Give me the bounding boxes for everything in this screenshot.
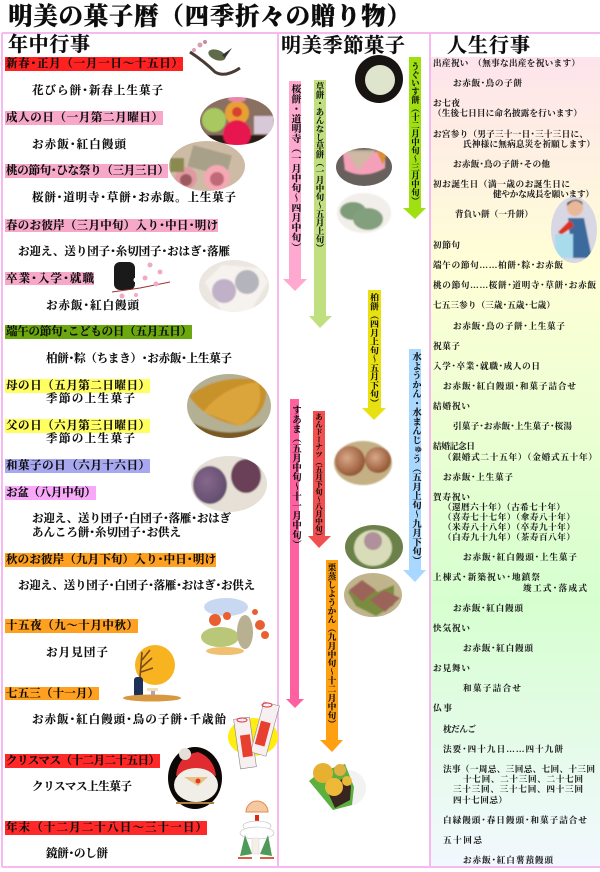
event: christmas bbox=[5, 753, 160, 793]
event: year end bbox=[5, 820, 207, 860]
list: birth celebrations: お七夜 bbox=[433, 97, 460, 108]
list: first seasonal festivals bbox=[433, 239, 596, 331]
event: new year: 新春･正月（一月一日～十五日） bbox=[6, 56, 183, 70]
photo: kashiwa mochi bbox=[187, 374, 271, 438]
list: longevity: （喜寿七十七年）（傘寿八十年） bbox=[443, 511, 575, 522]
arrow: uguisu mochi: うぐいす餅（十二月中旬～三月中旬） bbox=[410, 61, 420, 205]
event: wagashi day: 和菓子の日（六月十六日） bbox=[6, 458, 150, 472]
event: autumn equinox: 秋のお彼岸（九月下旬）入り･中日･明け bbox=[6, 552, 216, 566]
list: longevity bbox=[433, 491, 577, 562]
list: longevity: （米寿八十八年）（卒寿九十年） bbox=[443, 521, 575, 532]
list: construction ceremonies: 竣工式･落成式 bbox=[523, 582, 587, 593]
list: recovery and sympathy: 快気祝い bbox=[433, 622, 470, 633]
list: buddhist services: 法要･四十九日……四十九餅 bbox=[443, 743, 563, 754]
list: birth celebrations: お赤飯･鳥の子餅 bbox=[453, 77, 522, 88]
title: 明美の菓子暦（四季折々の贈り物） bbox=[8, 2, 411, 30]
list: wedding: お赤飯･上生菓子 bbox=[443, 471, 513, 482]
arrow: suama bbox=[286, 399, 304, 708]
event: graduation: 卒業･入学･就職 bbox=[6, 271, 94, 285]
list: buddhist services: 仏事 bbox=[433, 702, 452, 713]
event: christmas: クリスマス上生菓子 bbox=[32, 779, 132, 793]
life events column background bbox=[431, 34, 600, 867]
list: celebratory sweets: 入学･卒業･就職･成人の日 bbox=[433, 360, 540, 371]
photo: an donuts bbox=[334, 441, 392, 485]
list: celebratory sweets: 祝菓子 bbox=[433, 340, 460, 351]
list: buddhist services bbox=[433, 702, 595, 865]
list: birth celebrations: 氏神様に無病息災を祈願します） bbox=[463, 138, 595, 149]
photo: sakura mochi on plate bbox=[336, 148, 392, 186]
list: birth celebrations: お宮参り（男子三十一日･三十三日に、 bbox=[433, 128, 588, 139]
event: obon: お盆（八月中旬） bbox=[6, 485, 96, 499]
list: birth celebrations: 出産祝い （無事な出産を祝います） bbox=[433, 57, 580, 68]
event: father's day: 季節の上生菓子 bbox=[46, 431, 136, 445]
arrow: kashiwa mochi: 柏餅（四月上旬～五月下旬） bbox=[369, 292, 379, 407]
photo: ohagi bbox=[191, 456, 267, 512]
arrow: kuri mushi yokan: 栗蒸しようかん（九月中旬～十二月中旬） bbox=[327, 562, 337, 728]
arrow: sakura mochi bbox=[283, 81, 307, 291]
event: autumn equinox: お迎え、送り団子･白団子･落雁･おはぎ･お供え bbox=[18, 578, 255, 592]
list: buddhist services: 三十三回、三十七回、四十三回 bbox=[453, 783, 583, 794]
icon: full moon with vase bbox=[123, 645, 181, 702]
panel: annual events bbox=[5, 32, 279, 860]
event: shichi-go-san: お赤飯･紅白饅頭･鳥の子餅･千歳飴 bbox=[32, 712, 228, 726]
event: spring equinox: 春のお彼岸（三月中旬）入り･中日･明け bbox=[6, 218, 218, 232]
list: buddhist services: 四十七回忌） bbox=[453, 794, 507, 805]
event: father's day bbox=[5, 418, 150, 445]
event: shichi-go-san: 七五三（十一月） bbox=[6, 686, 99, 700]
event: coming of age: お赤飯･紅白饅頭 bbox=[32, 137, 126, 151]
list: recovery and sympathy: お赤飯･紅白饅頭 bbox=[463, 642, 533, 653]
photo: baby with rice cake bbox=[551, 197, 597, 263]
arrow: suama: すあま（五月中旬～十一月中旬） bbox=[290, 405, 302, 549]
panel: life events bbox=[433, 34, 599, 865]
event: father's day: 父の日（六月第三日曜日） bbox=[6, 418, 150, 432]
list: longevity: （還暦六十年）（古希七十年） bbox=[443, 501, 565, 512]
list: celebratory sweets: お赤飯･紅白饅頭･和菓子詰合せ bbox=[443, 380, 576, 391]
list: buddhist services: 枕だんご bbox=[443, 723, 476, 734]
event: children's day: 端午の節句･こどもの日（五月五日） bbox=[6, 324, 192, 338]
event: obon bbox=[5, 485, 232, 539]
list: wedding: 結婚祝い bbox=[433, 400, 470, 411]
list: construction ceremonies: 上棟式･新築祝い･地鎮祭 bbox=[433, 571, 540, 582]
list: first seasonal festivals: お赤飯･鳥の子餅･上生菓子 bbox=[453, 320, 565, 331]
list: birth celebrations: 健やかな成長を願います） bbox=[493, 188, 594, 199]
event: coming of age bbox=[5, 110, 163, 151]
photo: mizu manju on leaf bbox=[345, 525, 403, 569]
arrow: uguisu mochi bbox=[403, 57, 426, 219]
list: construction ceremonies bbox=[433, 571, 587, 613]
icon: chitose candy bags bbox=[228, 702, 279, 769]
arrow: an donut: あんドーナツ（五月下旬～八月中旬） bbox=[314, 413, 324, 540]
heading: life events: 人生行事 bbox=[447, 34, 530, 57]
list: first seasonal festivals: 桃の節句……桜餅･道明寺･草餅･お赤飯 bbox=[433, 279, 596, 290]
icon: school bag and blossoms bbox=[112, 262, 170, 298]
arrow: mizu yokan: 水ようかん・水まんじゅう（五月上旬～九月下旬） bbox=[410, 351, 422, 565]
event: moon viewing: お月見団子 bbox=[46, 645, 108, 659]
event: hinamatsuri: 桃の節句･ひな祭り（三月三日） bbox=[6, 163, 169, 177]
list: birth celebrations: （生後七日目に命名披露を行います） bbox=[433, 107, 582, 118]
list: celebratory sweets bbox=[433, 340, 576, 391]
icon: bird on plum branch bbox=[190, 40, 240, 74]
event: moon viewing bbox=[5, 618, 138, 659]
event: coming of age: 成人の日（一月第二月曜日） bbox=[6, 110, 163, 124]
list: longevity: お赤飯･紅白饅頭･上生菓子 bbox=[463, 551, 577, 562]
event: year end: 鏡餅･のし餅 bbox=[46, 846, 108, 860]
list: longevity: 賀寿祝い bbox=[433, 491, 470, 502]
list: recovery and sympathy: お見舞い bbox=[433, 662, 470, 673]
list: first seasonal festivals: 七五三参り（三歳･五歳･七歳） bbox=[433, 299, 555, 310]
arrow: kusa mochi bbox=[309, 80, 332, 328]
list: wedding: 引菓子･お赤飯･上生菓子･桜湯 bbox=[453, 420, 572, 431]
event: mother's day: 季節の上生菓子 bbox=[46, 391, 136, 405]
event: graduation: お赤飯･紅白饅頭 bbox=[46, 298, 140, 312]
arrow: an donut bbox=[308, 411, 331, 548]
event: graduation bbox=[5, 271, 140, 312]
event: autumn equinox bbox=[5, 552, 255, 592]
list: wedding: 結婚記念日 bbox=[433, 440, 475, 451]
photo: sakura mochi bbox=[169, 141, 245, 191]
heading: annual events: 年中行事 bbox=[8, 32, 90, 56]
panel: seasonal sweets bbox=[281, 33, 426, 810]
list: buddhist services: 十七回、二十三回、二十七回 bbox=[463, 773, 583, 784]
event: obon: お迎え、送り団子･白団子･落雁･おはぎ bbox=[32, 511, 232, 525]
icon: kagami mochi bbox=[238, 801, 274, 858]
event: mother's day: 母の日（五月第二日曜日） bbox=[6, 378, 150, 392]
event: spring equinox: お迎え、送り団子･糸切団子･おはぎ･落雁 bbox=[18, 244, 230, 258]
event: spring equinox bbox=[5, 218, 230, 258]
list: construction ceremonies: お赤飯･紅白饅頭 bbox=[453, 602, 523, 613]
arrow: mizu yokan bbox=[403, 349, 426, 582]
photo: kusa manju bbox=[337, 193, 391, 233]
list: recovery and sympathy: 和菓子詰合せ bbox=[463, 682, 521, 693]
list: first seasonal festivals: 端午の節句……柏餅･粽･お赤飯 bbox=[433, 259, 563, 270]
arrow: sakura mochi: 桜餅・道明寺（一月中旬～四月中旬） bbox=[290, 83, 301, 252]
event: new year bbox=[5, 56, 183, 97]
list: wedding bbox=[433, 400, 597, 482]
icon: autumn jizo landscape bbox=[201, 598, 269, 655]
list: birth celebrations: 初お誕生日（満一歳のお誕生日に bbox=[433, 178, 570, 189]
event: hinamatsuri: 桜餅･道明寺･草餅･お赤飯。上生菓子 bbox=[32, 190, 236, 204]
event: children's day bbox=[5, 324, 232, 365]
event: children's day: 柏餅･粽（ちまき）･お赤飯･上生菓子 bbox=[46, 351, 232, 365]
photo: mizu yokan bbox=[344, 573, 402, 617]
photo: uguisu mochi bbox=[355, 55, 403, 103]
heading: seasonal sweets: 明美季節菓子 bbox=[281, 33, 405, 57]
list: first seasonal festivals: 初節句 bbox=[433, 239, 460, 250]
arrow: kusa mochi: 草餅・あんなし草餅（一月中旬～五月上旬） bbox=[315, 81, 325, 252]
event: christmas: クリスマス（十二月二十五日） bbox=[6, 753, 160, 767]
arrow: kashiwa mochi bbox=[362, 290, 386, 420]
arrow: kuri mushi yokan bbox=[320, 560, 343, 752]
list: longevity: （白寿九十九年）（茶寿百八年） bbox=[443, 531, 575, 542]
event: hinamatsuri bbox=[5, 163, 236, 204]
list: birth celebrations bbox=[433, 57, 595, 219]
list: wedding: （銀婚式二十五年）（金婚式五十年） bbox=[443, 451, 597, 462]
list: birth celebrations: お赤飯･鳥の子餅･その他 bbox=[453, 158, 550, 169]
list: recovery and sympathy bbox=[433, 622, 533, 693]
event: new year: 花びら餅･新春上生菓子 bbox=[32, 83, 164, 97]
list: buddhist services: お赤飯･紅白薯蕷饅頭 bbox=[463, 854, 553, 865]
event: moon viewing: 十五夜（九～十月中秋） bbox=[6, 618, 138, 632]
event: mother's day bbox=[5, 378, 150, 405]
event: shichi-go-san bbox=[5, 686, 228, 726]
event: obon: あんころ餅･糸切団子･お供え bbox=[32, 525, 181, 539]
list: buddhist services: 五十回忌 bbox=[443, 834, 483, 845]
list: buddhist services: 白緑饅頭･春日饅頭･和菓子詰合せ bbox=[443, 814, 587, 825]
list: buddhist services: 法事（一周忌、三回忌、七回、十三回 bbox=[443, 763, 595, 774]
photo: assorted jo-namagashi bbox=[200, 97, 274, 145]
event: year end: 年末（十二月二十八日～三十一日） bbox=[6, 820, 207, 834]
photo: chestnut sweet bbox=[309, 763, 366, 810]
list: birth celebrations: 背負い餅（一升餅） bbox=[455, 208, 533, 219]
photo: santa sweet bbox=[168, 747, 222, 809]
photo: red and white manju bbox=[199, 260, 269, 312]
